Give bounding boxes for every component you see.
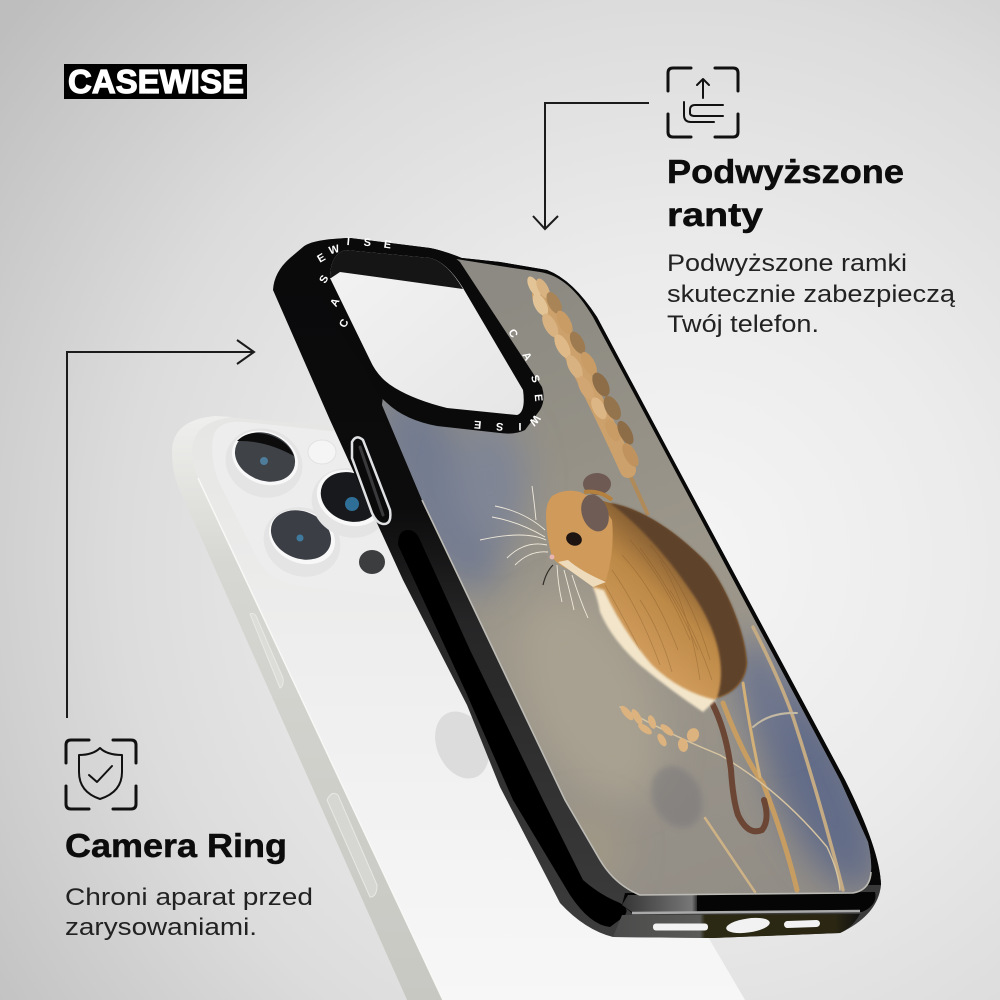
port 2 xyxy=(725,916,771,935)
body xyxy=(547,492,747,707)
nose xyxy=(550,554,554,560)
description: raised edges: Podwyższone ramki xyxy=(667,250,907,277)
camera window xyxy=(330,250,524,415)
art glass rim xyxy=(422,500,871,895)
belly xyxy=(593,587,716,712)
ring lettering: I xyxy=(518,420,522,432)
tail xyxy=(712,703,767,831)
whiskers xyxy=(480,486,588,618)
ring lettering: E xyxy=(315,251,328,265)
grass stems xyxy=(620,627,843,892)
lower lens xyxy=(253,496,351,588)
side lens slot xyxy=(398,530,627,927)
ring lettering: W xyxy=(328,243,341,257)
camera bump xyxy=(212,422,412,596)
ring lettering: A xyxy=(519,350,534,363)
case right edge xyxy=(460,258,881,885)
side button silver xyxy=(352,437,390,524)
port 1 xyxy=(653,924,708,930)
icon: shield xyxy=(66,740,136,809)
side button upper xyxy=(250,613,283,688)
ring lettering: S xyxy=(317,273,331,286)
lidar xyxy=(359,550,385,574)
description: raised edges: skutecznie zabezpieczą xyxy=(667,281,956,308)
black case xyxy=(273,238,881,938)
side button lower xyxy=(327,793,377,897)
ring lettering: S xyxy=(363,237,371,249)
ring lettering: S xyxy=(528,373,542,384)
arrow: raised edges xyxy=(533,103,649,229)
description: camera ring: Chroni aparat przed xyxy=(65,884,313,911)
ring lettering: C xyxy=(337,317,352,330)
heading: raised edges: Podwyższone xyxy=(667,153,904,190)
silver line xyxy=(632,911,860,913)
eye xyxy=(566,532,582,546)
far ear xyxy=(583,473,611,495)
logo: CASEWISE xyxy=(68,63,244,100)
phone side band xyxy=(172,416,443,1000)
white phone xyxy=(172,416,745,1000)
ring lettering: S xyxy=(496,420,504,432)
ring lettering: I xyxy=(346,236,350,248)
ring lettering: E xyxy=(532,394,544,402)
heading line 2: ranty xyxy=(667,196,764,233)
mouse artwork panel xyxy=(382,259,872,894)
ring lettering xyxy=(315,236,544,432)
window dark inner wall xyxy=(330,250,463,289)
heading: camera ring: Camera Ring xyxy=(65,827,287,864)
ring lettering: E xyxy=(474,418,482,430)
description: raised edges xyxy=(667,250,956,338)
ring lettering: C xyxy=(505,327,520,340)
ring lettering: W xyxy=(526,412,542,428)
wheat ear xyxy=(520,267,649,515)
ring lettering: E xyxy=(383,239,392,251)
apple logo xyxy=(425,703,499,787)
description: raised edges: Twój telefon. xyxy=(667,311,819,338)
bottom lower band xyxy=(613,914,860,938)
back shading xyxy=(610,503,747,698)
port 3 xyxy=(784,920,820,928)
icon: raised edges xyxy=(668,68,738,137)
head xyxy=(546,491,613,580)
flash xyxy=(308,440,336,464)
bottom upper band xyxy=(622,892,875,913)
mouse xyxy=(480,473,747,712)
fur strokes xyxy=(605,540,712,680)
near ear xyxy=(581,494,609,532)
blue-grey background washes xyxy=(382,399,514,600)
description: camera ring: zarysowaniami. xyxy=(65,914,257,941)
case outer frame xyxy=(273,238,881,938)
ring lettering: A xyxy=(328,296,343,309)
arrow: camera ring xyxy=(67,340,254,718)
side lens xyxy=(301,457,399,549)
main lens xyxy=(216,418,312,508)
small grain sprig xyxy=(619,704,701,753)
camera ring xyxy=(301,236,544,434)
description: camera ring xyxy=(65,884,313,941)
